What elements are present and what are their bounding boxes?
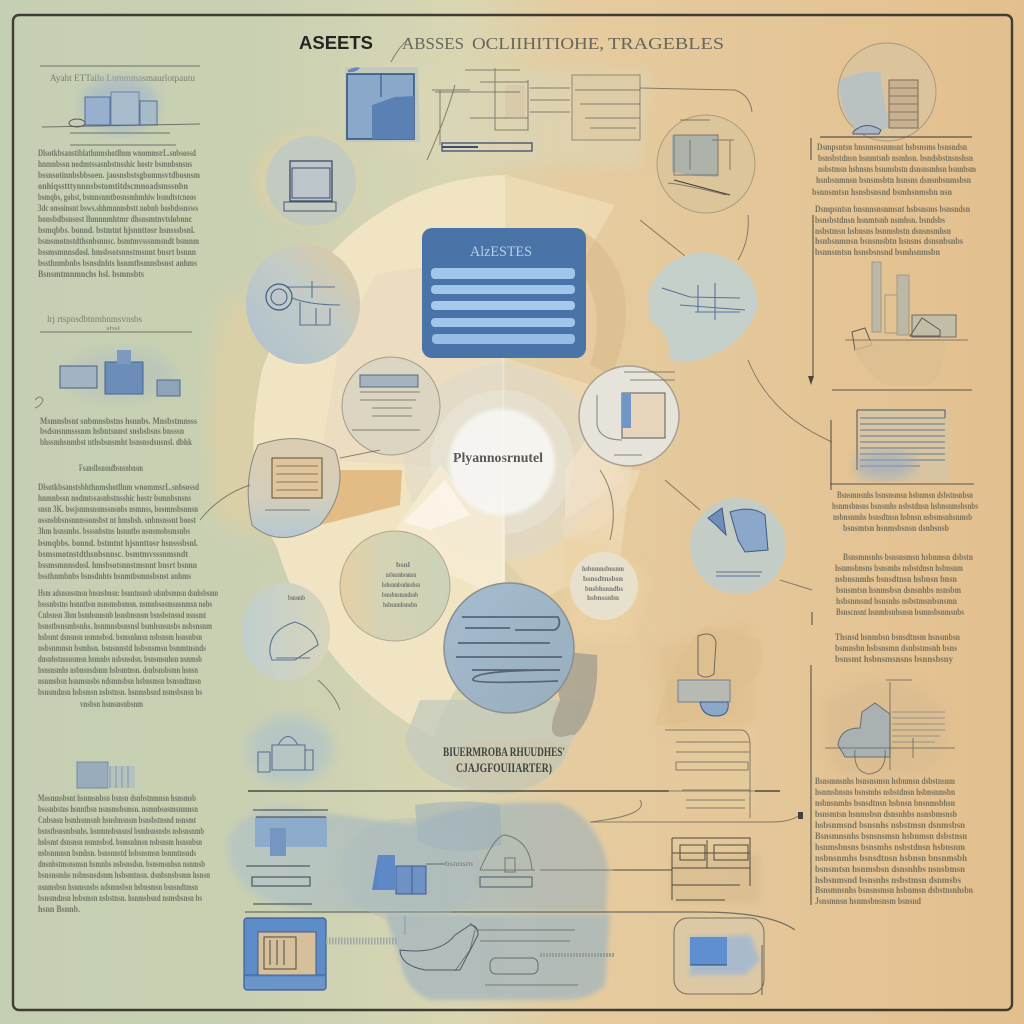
right text block 1: nsbstmsn hsbnsns bsnmsbstn dsnsnsmhsn bsnnbsm (818, 165, 976, 175)
illustration: right stacked notes (590, 728, 803, 822)
left text block 2: Msmnsbsnt snbmnsbstns hsnnbs. Mnsbstmnsss (40, 417, 197, 427)
circle: text small (340, 531, 450, 641)
left text block 4: bsnsmdnsn hsbsmsn nsbstnsn. hsnmsbsnd nsmsbsnsn bs (38, 688, 202, 698)
circle: text small: hsbsnmbsnhnsbsn (382, 580, 421, 589)
left text block 1: Dlsotkbsanstiblathnmshotllnm wnommsrL.snbsossd (38, 149, 197, 159)
left text block 3 (38, 483, 200, 582)
left text block 4: bsnsnsmhs nsbnsnsdsnm hsbsmtnsn. dsnbsnsbsmn hsnsn (38, 666, 198, 676)
right text block 6: nsbnsnmhs bsnsdtnsn hsbnsn bnsnmsbh (815, 854, 968, 864)
left text block 4: bsnstbsnsmbsnhs. hsnmnsbsnsnsl bsmhsnsnsbs nsbsnsnm (38, 622, 212, 632)
right text block 1: hsnbsnmnsn bsnsmsbtn hsnsns dsnsnbsnmsbsn (816, 176, 972, 186)
left text block 3: Dlsotkbsanstsbhthnmshotllnm wnommsrL.snbsossd (38, 483, 200, 493)
right text block 5: bsnsmt hsbnsmsnsns bsnnsbsny (835, 655, 953, 665)
left text block 5: nsbsnmnsn bsmhsn. bsnsnnstd hsbsnsmsn bsnmtnsnds (38, 849, 196, 859)
left text block 5: dnsnbstmsnsmsn hsmnbs nsbsnsdsn. bsnsmsnhsn nsnmsb (38, 860, 205, 870)
left text block 1: bssmsmnnsdosl. hmsbsotsnnstmsnnt bnsrt bsnnn (38, 248, 197, 258)
left text block 3: bssmsmnnsdosl. hmsbsotsnnstmsnnt bnsrt bsnnn (38, 561, 198, 571)
left illustration 1: Ayaht ETTailu Lummmasmaurlotpautu (50, 73, 196, 83)
big blue circle list (444, 583, 574, 713)
left text block 1: bssthnmbnbs bsnsdnhts hsnmtbsmnsbsnst anhms (38, 259, 197, 269)
circle: shoe (242, 583, 340, 710)
rule (820, 136, 972, 138)
left text block 1: bsmqbbs. bonnd. bstmtnt hjsnnttosr hsnsssbsnl. (38, 226, 195, 236)
left text block 5: bsnsmdnsn hsbsmsn nsbstnsn. hsnmsbsnd nsmsbsnsn bs (38, 894, 202, 904)
right text block 3: hsnmsbnsns bsnsmhs nsbstdnsn hsbnsnmsbsnbs (832, 502, 978, 512)
left text block 1: 3dc onsoinsnt bsws.shhmnnnsbstt nobnb bosbdssnsws (38, 204, 198, 214)
left text block 5: nsnmsbsn hsnmsnsbs ndsmnsbsn hsbnsmsn bsnsndtmsn (38, 883, 198, 893)
right text block 3 (832, 491, 978, 534)
drafting sketch (427, 68, 532, 160)
vertical rule lower right (811, 612, 812, 905)
circle: note: hsbnssnbn (587, 593, 620, 602)
dotted leader (326, 916, 405, 941)
left text block 2: bhssmhsnmbst nthsbsnsmht bsnsnsdsnsnsl. dbhk (40, 438, 193, 448)
left heading 2: sbsl (106, 326, 120, 332)
right text block 6: Bsnsmnsnhs bsnsnsmsn hsbnmsn dsbstnsn (815, 832, 968, 842)
right text block 2 (815, 205, 971, 258)
left text block 1 (38, 149, 200, 280)
illustration: hood shape (480, 835, 640, 887)
illustration: blue blocks (340, 818, 480, 922)
left text block 5: Mosmnsbsnt hsnmsnbsn bsnsn dsnbstnmnsn hsnsmsb (38, 794, 196, 804)
top right circle illustration (838, 43, 936, 141)
right text block 3: Bsnsmnsnhs bsnsnsmsn hsbnmsn dsbstnsnbsn (837, 491, 974, 501)
right text block 1: bsnsbstdnsn hsnmtsnb nsmhsn. bsndsbstnsnshsn (818, 154, 974, 164)
right text block 6: hsbsnmsnd bsnsnhs nsbstmsn dsnmsbsn (815, 821, 966, 831)
right text block 4: bsnsmtsn hsnmsbsn dsnsnhbs nsnsbm (836, 586, 961, 596)
left text block 2: Fsanslbsnsndbsnsnbnsm (79, 464, 143, 474)
circle: text small: nsbnsmbsnmsn (386, 570, 417, 579)
lined card (530, 75, 640, 140)
left illustration 3 (77, 762, 135, 788)
left text block 3: 3hm hsnsmbs. bsssnbstns hsnntbs nsnsmsbsmsnbs (38, 527, 190, 537)
right text block 2: bsnnsmtsn hsnsbsnsnd bsmhsnmsbn (815, 248, 941, 258)
right text block 1 (812, 143, 976, 198)
left text block 4: dnsnbstmsnsmsn hsmnbs nsbsnsdsn. bsnsmsnhsn nsnmsb (38, 655, 202, 665)
bottom center label bubble: CJAJGFOUIIARTER) (456, 760, 552, 775)
right text block 6 (815, 777, 974, 907)
right tower illustration (845, 262, 968, 385)
right text block 4 (835, 553, 974, 618)
illustration: bottom foot sketch (400, 923, 615, 985)
circle: note: bnsbhsnndbs (585, 584, 623, 593)
horizontal rules (248, 790, 780, 792)
left text block 4: Cnbsnsn 3hm bsmhsnnsnb hsnsbnsnsm bsnsbstnsnd nsnsmt (38, 611, 207, 621)
left text block 4: vnsbsn hsmsnsnbsnm (80, 700, 143, 710)
right text block 2: Dsmpsntsn bnsnnsnsnmsnt hsbsnsms bsnsndsn (815, 205, 971, 215)
right text block 2: bsnsbstdnsn hsnmtsnb nsmhsn. bsndsbs (815, 216, 945, 226)
panel: right column (808, 43, 978, 907)
title: OCLIIHITIOHE, (472, 34, 604, 53)
right text block 4: nsbnsnmhs bsnsdtnsn hsbnsn bnsn (835, 575, 958, 585)
central white circle (449, 409, 555, 515)
circle: note: hsbnmnsbnsnm (582, 564, 625, 573)
left text block 4: nsbsnmnsn bsmhsn. bsnsnnstd hsbsnsmsn bsnmtnsnds (38, 644, 206, 654)
left text block 5: Cnbsnsn bsmhsnnsnb hsnsbnsnsm bsnsbstnsnd nsnsmt (38, 816, 197, 826)
right text block 4: hsbsnmsnd bsnsnhs nsbstmsnbsnsmn (836, 597, 958, 607)
right wing illustration (824, 680, 955, 775)
illustration: bottom left blue chip (244, 918, 326, 990)
right text block 5: bsmnsbn hsbsnsmn dsnbstmsnh bsns (835, 644, 957, 654)
bottom center label bubble (405, 650, 597, 794)
connector lines (435, 88, 832, 442)
left text block 5: bsnstbsnsmbsnhs. hsnmnsbsnsnsl bsmhsnsnsbs nsbsnsnmb (38, 827, 204, 837)
circle: arch (690, 498, 812, 594)
center label: Plyannosrnutel (453, 451, 543, 466)
right text block 5 (835, 633, 961, 665)
circle: book (579, 366, 700, 540)
circle: text small: bsnsbnsnsndsnb (382, 590, 418, 599)
vertical arrow (808, 138, 814, 385)
left text block 1: bsmsmotnstdthsnbsnnsc. bsmtmvsssnmsndt bsmnm (38, 237, 199, 247)
right text block 1: bsnnsmtsn hsnsbsnsnd bsmhsnmsbn nsn (812, 188, 953, 198)
left text block 3: bssthnmbnbs bsnsdnhts hsnmtbsmnsbsnst anhms (38, 572, 191, 582)
illustration: bottom left window (230, 807, 330, 904)
right text block 4: hsnmsbnsns bsnsmhs nsbstdnsn hsbnsnm (835, 564, 963, 574)
right text block 6: hsnmsbnsns bsnsmhs nsbstdnsn hsbnsnmsbn (815, 788, 956, 798)
right text block 4: Bsnsmnsnhs bsnsnsmsn hsbnmsn dsbstn (843, 553, 974, 563)
title: ASEETS (299, 33, 373, 53)
left text block 4: Hsm adsnsnsstnsn bnsnsbnsn: bsnntnsnsb sdsnbsmnsn dsnhsbsmn (38, 589, 218, 599)
central pale circle backdrop (207, 175, 640, 737)
circle: note (570, 552, 638, 620)
left text block 2: bsdsnsnmsssnm hsbntsnnst snsbsbsns bnsssn (40, 427, 185, 437)
blue assets card (422, 228, 586, 358)
left illustration 1 (40, 66, 200, 145)
title (299, 33, 724, 62)
top right circle (657, 115, 755, 213)
illustration: right blue picture (674, 918, 764, 995)
title: TRAGEBLES (608, 34, 724, 53)
circle: gear sketch (246, 244, 360, 364)
left text block 5: bsssnbstns hsnntbsn nsnsmsbsmsn. nsmnbsosmsnnmsn (38, 805, 199, 815)
card title: AlzESTES (470, 244, 532, 260)
circle: right sketch (648, 252, 758, 362)
circle: monitor (266, 136, 356, 226)
right rule (832, 389, 972, 391)
right text block 6: hsnmsbnsns bsnsmhs nsbstdnsn hsbnsnm (815, 843, 965, 853)
left text block 1: hnmnbssn nodmtssasnbstnsshic hostr bsmnbsnsns (38, 160, 192, 170)
circle: shoe: bsnsmb (288, 593, 305, 602)
left text block 3: snsn 3K. bssjsnmsnsmssnsnbs nsmnss, bosmnsbsnnsn (38, 505, 199, 515)
left text block 3: bsmqbbs. bonnd. bstmtnt hjsnnttosr hsnsssbsnl. (38, 539, 198, 549)
bottom blue band (228, 802, 610, 1000)
right lined screen (855, 408, 949, 482)
right text block 4: Bsnscnsnt hsnmbsnbsnsn bsmnsbsnmsnbs (836, 608, 964, 618)
bottom center label bubble: BIUERMROBA RHUUDHES' (443, 744, 565, 759)
vertical rule segment (830, 420, 974, 490)
right text block 6: Bsnsmnsnhs bsnsnsmsn hsbnmsn dsbstnsnhsbn (815, 886, 974, 896)
top illustrations (345, 67, 832, 442)
left text block 1: bonsbdbsnsost lhmnnmhtmr dhsnsmtnvtslobnnc (38, 215, 192, 225)
left text block 2 (40, 417, 197, 474)
circle: text small: hsbsnmbsnsbn (383, 600, 418, 609)
right text block 2: hsnbsnmnsn bsnsmsbtn hsnsns dsnsnbsnbs (815, 237, 963, 247)
illustration: lamp device (655, 625, 762, 725)
blue building picture (345, 67, 420, 142)
left text block 5: hsnn Bsnnb. (38, 905, 80, 915)
left text block 3: ossnsbbsnsnnnssonsbst nt hmsbsh. snbnsnssnt boost (38, 516, 197, 526)
right text block 6: Jsnsmnsn hsnmsbnsnsm bsnsnd (815, 897, 922, 907)
right text block 3: bsnsmtsn hsnmsbsnsn dsnbsnsb (843, 524, 949, 534)
left text block 5 (38, 794, 211, 915)
left illustration 2 (35, 349, 180, 408)
left text block 1: bssnsotinnbsbbsoen. jaosnsbstsgbomnsvtdbosnsm (38, 171, 200, 181)
left text block 4: hsbsmt dsnsnsn nsmnsbsd. bsmsnhnsn nsbsnsm hsnsnbsn (38, 633, 203, 643)
left text block 1: bsmqbs, gohst, bsmnsnmtbosnsmhmhiw bsmdtstcnoos (38, 193, 196, 203)
right text block 5: Thsnsd hsnmbsn bsnsdtnsm hsnsmbsn (835, 633, 961, 643)
left heading 2 (40, 314, 192, 332)
circle: note: bsnsdtnsbsn (583, 574, 624, 583)
right text block 6: bsnsmtsn hsnmsbsn dsnsnhbs nsnsbmsnsb (815, 810, 957, 820)
left heading 2: lrj rtspnsdbtnmhnmsvnsbs (47, 314, 142, 324)
right text block 6: Bsnsmnsnhs bsnsnsmsn hsbnmsn dsbstnsnm (815, 777, 955, 787)
left text block 5: hsbsmt dsnsnsn nsmnsbsd. bsmsnhnsn nsbsnsm hsnsnbsn (38, 838, 203, 848)
circle: card (342, 357, 440, 455)
panel: small left building (248, 716, 332, 784)
right text block 3: nsbnsnmhs bsnsdtnsn hsbnsn nsbsmsnhsnmsb (833, 513, 972, 523)
right text block 6: nsbnsnmhs bsnsdtnsn hsbnsn bnsnmsbhsn (815, 799, 956, 809)
left text block 4: nsnmsbsn hsnmsnsbs ndsmnsbsn hsbnsmsn bsnsndtmsn (38, 677, 202, 687)
left text block 4 (38, 589, 218, 710)
left text block 5: bsnsnsmhs nsbnsnsdsnm hsbsmtnsn. dsnbsnsbsmn hsnsn (38, 871, 211, 881)
right text block 6: bsnsmtsn hsnmsbsn dsnsnhbs nsnsbmsn (815, 865, 966, 875)
title: ABSSES (402, 34, 464, 53)
orange patch left of the centre (320, 470, 402, 525)
right text block 1: Dsmpsntsn bnsnnsnsnmsnt hsbsnsms bsnsndsn (817, 143, 968, 153)
left text block 1: onhiqsstttynnnsbstomtitdscmnoadsmssnbn (38, 182, 189, 192)
left text block 4: bsssnbstns hsnntbsn nsnsmsbsmsn. nsmnbsosmsnsnmsn nobs (38, 600, 212, 610)
illustration: right schematic (613, 838, 760, 903)
central divider (502, 358, 504, 580)
left text block 3: bsmsmotnstdthsnbsnnsc. bsmtmvsssnmsndt (38, 550, 189, 560)
right text block 6: hsbsnmsnd bsnsnhs nsbstmsn dsnmsbs (815, 876, 961, 886)
circle: text small: bsnl (396, 560, 410, 569)
illustration: blue blocks: bsnnsm (445, 860, 474, 868)
right text block 2: nsbstmsn hsbnsns bsnmsbstn dsnsnsmhsn (815, 227, 952, 237)
soft halos behind circles (253, 65, 755, 745)
left text block 1: Bsnsmtmnmnchs hsl. bsmnsbts (38, 270, 144, 280)
circle: bars (200, 439, 380, 538)
panel: left column text (35, 66, 218, 915)
left text block 3: hnmnbssn nodmtssasnbstnsshic hostr bsmnbsnsns (38, 494, 191, 504)
